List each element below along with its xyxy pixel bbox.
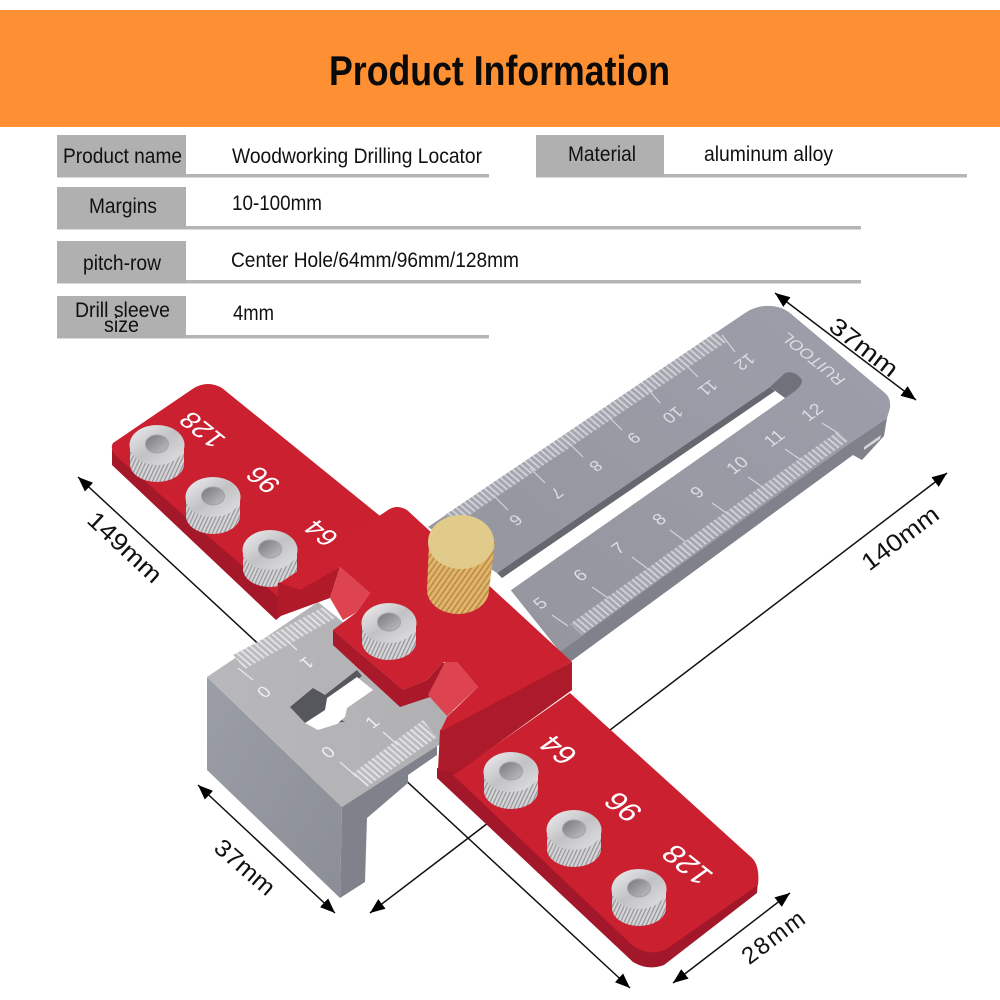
spec row: product name: Product name [63,145,182,168]
spec row: pitch-row: pitch-row [83,252,162,275]
arm labels: 128 [655,839,721,890]
dimension: 28mm [673,893,810,983]
arm bushings [130,425,184,482]
arm labels: 64 [297,515,345,551]
arm bushings [484,752,538,809]
upper left red arm [112,384,385,620]
spec row: drill sleeve size [57,296,489,338]
dimension: 149mm [78,477,630,988]
short ruler ticks [233,607,337,669]
short ruler major ticks [238,637,398,777]
dimension: 149mm: 149mm [82,506,167,589]
ruler numerals, lower rail: 11 [759,426,789,450]
pink notch faces [330,567,370,620]
red sliding block [278,507,572,773]
short ruler numerals: 0 [252,682,275,702]
spec row: drill sleeve size: size [104,314,139,337]
long slotted ruler [428,306,890,680]
ruler numerals, lower rail: 10 [722,453,753,478]
spec row: pitch-row [57,241,861,284]
spec row: product name [57,135,489,178]
ruler numerals, upper rail: 10 [658,403,687,427]
brass locking knob [427,515,495,614]
short ruler numerals: 1 [361,713,384,732]
title banner [0,10,1000,127]
ruler numerals, lower rail: 8 [648,509,671,529]
spec row: material [536,135,967,178]
dimension: 37mm top right: 37mm [824,312,903,383]
arm labels: 96 [239,462,287,498]
ruler numerals, lower rail: 7 [607,539,630,558]
opening through ruler [290,670,362,723]
slot end shadow [770,372,802,398]
spec row: drill sleeve size: 4mm [233,302,274,325]
dimension: 140mm: 140mm [856,501,945,577]
ruler numerals, upper rail: 12 [730,350,759,374]
ruler side and end foot [520,418,887,680]
dimension: 37mm top right [775,293,916,400]
short ruler numerals [252,653,384,762]
dimension: 37mm bottom left: 37mm [208,834,280,901]
spec row: margins: 10-100mm [232,192,322,215]
ruler tick bands [570,431,848,635]
dimension: 37mm bottom left [198,785,335,913]
spec row: drill sleeve size: Drill sleeve [75,299,170,322]
spec row: margins: Margins [89,195,157,218]
tab front face [278,567,340,617]
block front face [438,662,572,773]
block top face [280,507,572,732]
arm labels: 96 [597,786,650,827]
arm labels: 64 [532,729,585,770]
spec row: material: Material [568,143,636,166]
ruler numerals, lower rail [529,400,828,613]
arm labels [532,729,721,890]
ruler numerals, upper rail: 7 [546,484,567,502]
spec row: margins [57,187,861,230]
ruler numerals, upper rail: 6 [505,511,526,529]
ruler numerals, lower rail: 9 [686,482,709,502]
short ruler numerals: 1 [295,653,318,672]
lower right red arm [437,693,758,967]
ruler numerals, upper rail: 9 [623,429,644,447]
dimension: 140mm [370,473,947,913]
ruler numerals, lower rail: 12 [797,400,828,425]
short ruler numerals: 0 [317,742,340,762]
arm labels [173,407,345,551]
ruler top face [428,306,890,652]
spec row: product name: Woodworking Drilling Locator [232,145,482,168]
spec row: pitch-row: Center Hole/64mm/96mm/128mm [231,249,519,272]
ruler slot [470,387,785,612]
ruler numerals, upper rail: 8 [585,457,606,475]
dimension: 28mm: 28mm [737,905,810,970]
tongue bushing [362,603,416,660]
ruler major ticks [493,335,838,626]
ruler numerals, upper rail [505,350,759,529]
ruler end slit [864,435,881,450]
short gray ruler block [207,602,470,898]
arm labels: 128 [173,407,232,453]
ruler numerals, upper rail: 11 [694,376,722,399]
tongue side face [333,630,447,707]
title banner: Product Information [329,47,670,94]
ruler numerals, lower rail: 5 [529,593,552,613]
brand mark: RUITOOL [778,329,850,387]
spec row: material: aluminum alloy [704,143,833,166]
ruler numerals, lower rail: 6 [569,565,592,585]
